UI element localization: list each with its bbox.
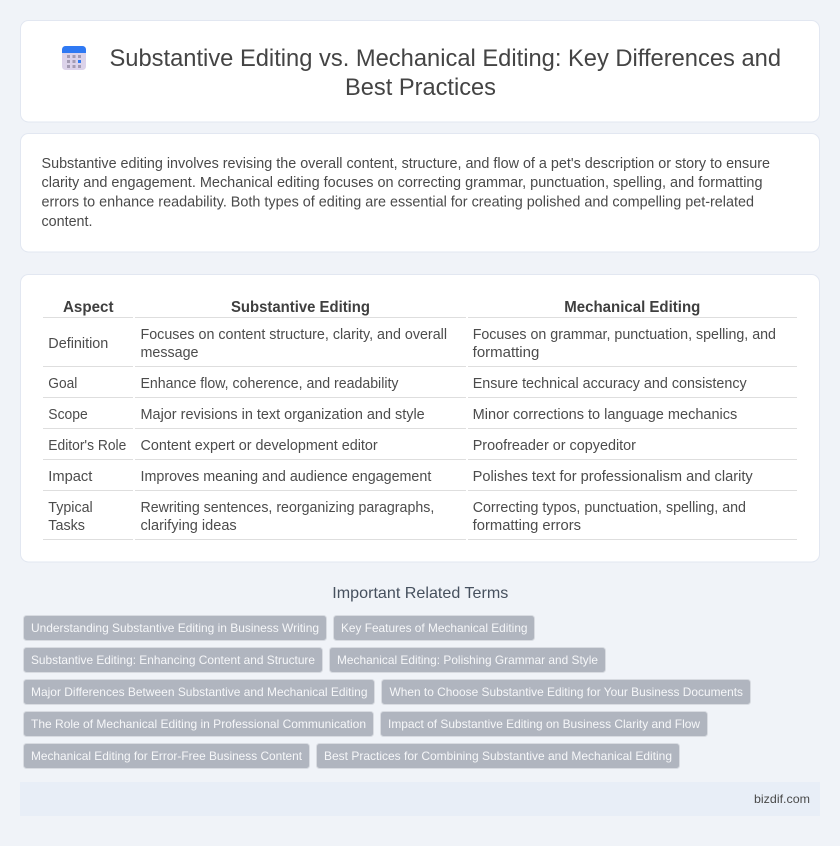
table row: Editor's Role: Content expert or development editor [140, 438, 378, 454]
tag: Substantive Editing: Enhancing Content and Structure [31, 653, 315, 667]
table row: Goal [43, 376, 797, 398]
table row: Impact [43, 469, 797, 491]
heading: related terms: Important Related Terms [332, 585, 508, 602]
table row: Scope [43, 407, 797, 429]
table row: Editor's Role: Proofreader or copyeditor [473, 438, 636, 454]
table row: Definition: Focuses on grammar, punctuation, spelling, and [473, 327, 776, 343]
panel: intro text [20, 134, 820, 252]
tag [334, 616, 534, 640]
tag: Major Differences Between Substantive and Mechanical Editing [31, 685, 368, 699]
panel: comparison table [20, 274, 820, 562]
table row: Editor's Role [43, 438, 797, 460]
table row: Impact: Impact [48, 469, 92, 485]
intro paragraph: errors to enhance readability. Both types of editing are essential for creating polished and compelling pet-related [42, 194, 754, 210]
table row: Impact: Improves meaning and audience engagement [140, 469, 431, 485]
panel: related term tags [24, 616, 750, 768]
table header row: Aspect [63, 299, 114, 316]
table row: Typical Tasks: formatting errors [473, 518, 581, 534]
table row: Scope: Scope [48, 407, 88, 423]
tag: Mechanical Editing for Error-Free Business Content [31, 749, 303, 763]
table row: Definition: message [140, 345, 198, 361]
tag [316, 744, 680, 768]
table row: Typical Tasks [43, 500, 797, 540]
table row: Typical Tasks: clarifying ideas [140, 518, 237, 534]
intro paragraph: Substantive editing involves revising the overall content, structure, and flow of a pet's description or story to ensure [42, 156, 770, 172]
tag: Mechanical Editing: Polishing Grammar and Style [337, 653, 598, 667]
table row: Typical Tasks: Correcting typos, punctuation, spelling, and [473, 500, 746, 516]
tag: When to Choose Substantive Editing for Your Business Documents [390, 685, 743, 699]
table header row: Substantive Editing [231, 299, 370, 316]
tag [24, 712, 374, 736]
table row: Scope: Minor corrections to language mechanics [473, 407, 737, 423]
table row: Goal: Enhance flow, coherence, and readability [140, 376, 399, 392]
table row: Goal: Goal [48, 376, 77, 392]
table row: Scope: Major revisions in text organization and style [140, 407, 425, 423]
tag [380, 712, 708, 736]
table row: Goal: Ensure technical accuracy and consistency [473, 376, 747, 392]
intro paragraph [42, 156, 770, 230]
table row: Definition: Focuses on content structure, clarity, and overall [140, 327, 447, 343]
tag: Impact of Substantive Editing on Business Clarity and Flow [388, 717, 700, 731]
tag: The Role of Mechanical Editing in Professional Communication [31, 717, 366, 731]
intro paragraph: clarity and engagement. Mechanical editing focuses on correcting grammar, punctuation, spelling, and formatting [42, 175, 762, 191]
table row: Editor's Role: Editor's Role [48, 438, 126, 454]
tag [24, 616, 326, 640]
title: Substantive Editing vs. Mechanical Editing: Key Differences and [110, 45, 781, 72]
footer: bizdif.com [754, 792, 810, 806]
tag [382, 680, 750, 704]
tag: Best Practices for Combining Substantive and Mechanical Editing [324, 749, 672, 763]
tag: Understanding Substantive Editing in Business Writing [31, 621, 319, 635]
table header row: Mechanical Editing [564, 299, 700, 316]
footer [20, 782, 820, 816]
table row: Typical Tasks: Typical [48, 500, 93, 516]
title [110, 45, 781, 101]
table row: Definition: Definition [48, 336, 108, 352]
tag [24, 648, 322, 672]
table row: Definition [43, 327, 797, 367]
table row: Typical Tasks: Rewriting sentences, reorganizing paragraphs, [140, 500, 434, 516]
tag [330, 648, 606, 672]
tag [24, 744, 310, 768]
table row: Definition: formatting [473, 345, 539, 361]
title: Best Practices [345, 74, 496, 101]
icon: calendar [62, 46, 86, 70]
table row: Typical Tasks: Tasks [48, 518, 85, 534]
table header row [43, 299, 797, 318]
tag [24, 680, 374, 704]
tag: Key Features of Mechanical Editing [341, 621, 528, 635]
panel: header [20, 20, 820, 122]
intro paragraph: content. [42, 214, 92, 230]
table row: Impact: Polishes text for professionalism and clarity [473, 469, 754, 485]
